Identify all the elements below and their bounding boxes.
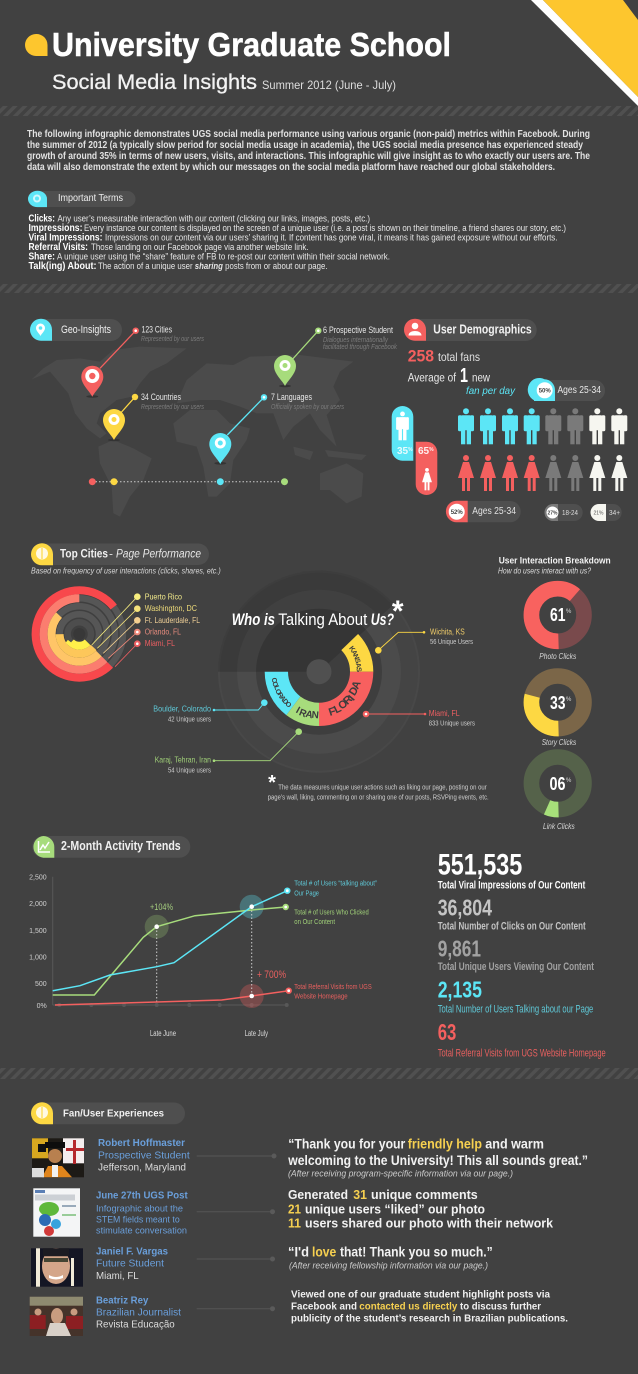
donut: photo clicks: Photo Clicks <box>539 652 576 661</box>
glossary of terms <box>28 214 566 272</box>
heading: who is talking about us: Who is <box>232 610 275 629</box>
stat: referral visits <box>438 1019 606 1060</box>
intro paragraph <box>27 129 590 173</box>
callout: Miami: Miami, FL <box>429 708 460 718</box>
post description: STEM fields meant to <box>96 1214 180 1225</box>
heading: experiences: Fan/User Experiences <box>63 1108 164 1120</box>
heading: top cities <box>31 543 209 565</box>
donut: story clicks: 33 <box>550 693 566 713</box>
donut chart: states <box>265 634 373 726</box>
donut: photo clicks: 61 <box>550 605 566 625</box>
subheading: top cities: Based on frequency of user interactions (clicks, shares, etc.) <box>31 565 221 575</box>
callout: Wichita: 56 Unique Users <box>430 639 473 646</box>
post results: 21 <box>288 1201 301 1216</box>
series labels: Website Homepage <box>294 992 348 1001</box>
donut: story clicks: Story Clicks <box>542 738 576 747</box>
subheading: interaction breakdown: How do users interact with us? <box>498 566 591 575</box>
name: Janiel F. Vargas <box>96 1245 168 1282</box>
map pin: countries: Represented by our users <box>141 404 204 411</box>
name: Robert Hoffmaster: Prospective Student <box>98 1149 190 1161</box>
name: Janiel F. Vargas: Janiel F. Vargas <box>96 1245 168 1257</box>
story: Beatriz Rey: to discuss further <box>460 1300 541 1312</box>
stat: clicks: 36,804 <box>438 895 492 921</box>
donut: story clicks: % <box>566 697 572 703</box>
photo: graduate with flag <box>32 1138 84 1177</box>
name: Robert Hoffmaster: Jefferson, Maryland <box>98 1162 186 1174</box>
x-axis labels: Late June <box>150 1029 176 1038</box>
heading: top cities: Page Performance <box>116 547 201 561</box>
panel: who is talking about us <box>153 571 489 801</box>
legend: 18-24 <box>544 504 583 521</box>
glossary of terms: Impressions on our content via our users’ sharing it. If content has gone viral, it means it has gained exposure without our efforts. <box>105 232 558 242</box>
growth labels <box>150 902 286 981</box>
donut: photo clicks <box>531 589 584 661</box>
panel: top cities <box>17 543 221 696</box>
post results: unique comments <box>371 1187 478 1202</box>
name: Robert Hoffmaster: Robert Hoffmaster <box>98 1137 185 1149</box>
testimonial: June 27th post <box>33 1187 554 1237</box>
name: Beatriz Rey <box>96 1294 181 1331</box>
map pin: cities: Represented by our users <box>141 336 204 343</box>
callout: Miami <box>363 708 475 727</box>
legend: women ages 25-34 <box>446 501 521 522</box>
map pin: languages <box>209 392 344 465</box>
story: Beatriz Rey: publicity of the student’s research in Brazilian publications. <box>291 1313 568 1325</box>
gender split: women: % <box>429 447 434 453</box>
highlight halos <box>145 895 264 1008</box>
intro paragraph: data will also demonstrate the extent by which our messages on the social media platform have reached our global stakeholders. <box>27 162 555 173</box>
quote: Robert Hoffmaster: (After receiving program-specific information via our page.) <box>288 1169 513 1179</box>
footnote <box>268 772 489 801</box>
fans per day: 1 <box>460 365 468 387</box>
panel: 2-month activity trends <box>29 836 377 1038</box>
chart axes: 2,000 <box>29 901 47 908</box>
legend: men ages 25-34 <box>528 378 605 401</box>
gender split: men <box>392 406 413 461</box>
panel: fan/user experiences <box>30 1102 588 1336</box>
quote: Janiel F. Vargas: that! Thank you so much.” <box>340 1244 493 1260</box>
donut: photo clicks: % <box>566 609 572 615</box>
stat: viral impressions: Total Viral Impressions of Our Content <box>438 879 586 891</box>
city legend: Ft. Lauderdale, FL <box>145 615 200 625</box>
donut: link clicks: 06 <box>550 774 566 794</box>
legend: men ages 25-34: 50% <box>539 388 551 394</box>
quote: Robert Hoffmaster: “Thank you for your <box>288 1135 406 1151</box>
series labels: on Our Content <box>294 917 336 926</box>
stat: clicks <box>438 895 586 932</box>
donut: story clicks <box>531 676 584 747</box>
map pin: countries: 34 Countries <box>141 392 181 402</box>
post description: Infographic about the <box>96 1204 183 1215</box>
map pin: prospective students <box>274 325 397 387</box>
story: Beatriz Rey <box>291 1288 568 1325</box>
heading: top cities: Top Cities <box>60 547 108 561</box>
testimonial: Robert Hoffmaster <box>32 1135 588 1179</box>
state labels: FLORIDA <box>327 679 364 719</box>
callout: Boulder: 42 Unique users <box>168 717 211 724</box>
stat: clicks: Total Number of Clicks on Our Content <box>438 920 586 932</box>
total fans: 258 <box>408 347 434 366</box>
quote: Janiel F. Vargas <box>288 1244 493 1270</box>
photo: group at table <box>30 1297 83 1336</box>
map pin: cities: 123 Cities <box>142 325 172 335</box>
date: Summer 2012 (June - July) <box>262 78 396 92</box>
panel: key totals <box>438 848 606 1060</box>
donut: link clicks: Link Clicks <box>543 822 575 831</box>
city legend: Washington, DC <box>145 603 197 613</box>
heading: geo-insights: Geo-Insights <box>61 324 111 336</box>
chart axes: 0% <box>37 1003 47 1010</box>
glossary of terms: Talk(ing) About: <box>28 261 96 272</box>
story: Beatriz Rey: Viewed one of our graduate student highlight posts via <box>291 1288 550 1300</box>
callout: Wichita <box>375 626 473 654</box>
growth labels: +104% <box>150 902 173 912</box>
quote: Janiel F. Vargas: “I'd <box>288 1244 309 1260</box>
series labels: Our Page <box>294 888 319 897</box>
name: Robert Hoffmaster <box>98 1137 190 1174</box>
heading: who is talking about us: Talking About <box>278 610 368 629</box>
heading: interaction breakdown: User Interaction Breakdown <box>499 555 611 565</box>
map pin: languages: Officially spoken by our users <box>271 404 344 411</box>
heading: who is talking about us: Us? <box>371 610 394 629</box>
legend: 34+ <box>590 504 622 521</box>
map pin: countries <box>103 392 204 441</box>
testimonial: Beatriz Rey <box>30 1288 568 1336</box>
gender split: women: 65 <box>418 446 429 457</box>
name: Beatriz Rey: Brazilian Journalist <box>96 1306 181 1318</box>
glossary of terms: A unique user using the “share” feature of FB to re-post our content within their social network. <box>57 252 390 262</box>
heading: user demographics: User Demographics <box>433 321 532 336</box>
glossary of terms: Those landing on our Facebook page via another website link. <box>91 242 308 252</box>
callout: Miami: 833 Unique users <box>429 720 475 727</box>
quote: Robert Hoffmaster: welcoming to the University! This all sounds great.” <box>287 1152 588 1168</box>
line: clicks <box>53 907 286 995</box>
logo icon <box>25 34 48 56</box>
donut: link clicks: % <box>566 778 572 784</box>
name: Beatriz Rey: Beatriz Rey <box>96 1294 148 1306</box>
pictogram row: men <box>458 408 627 444</box>
testimonial: Janiel F. Vargas <box>31 1244 493 1287</box>
footnote: page’s wall, liking, commenting on or sharing one of our posts, RSVPing events, etc. <box>268 794 489 801</box>
line: talking about <box>53 891 287 991</box>
series labels: Total Referral Visits from UGS <box>294 982 372 991</box>
fans per day: fan per day <box>466 385 516 397</box>
legend: women ages 25-34: 52% <box>451 510 463 516</box>
post description <box>96 1189 188 1236</box>
gender split: men: % <box>408 447 413 453</box>
heading: important terms: Important Terms <box>58 193 123 204</box>
state labels <box>270 645 364 721</box>
post description: June 27th UGS Post <box>96 1189 188 1201</box>
glossary of terms: Viral Impressions: <box>28 232 102 244</box>
series labels: Total # of Users Who Clicked <box>294 907 369 916</box>
stat: viral impressions <box>438 848 586 891</box>
total fans: total fans <box>438 350 480 364</box>
map pin: prospective students: Dialogues internationally <box>323 337 388 344</box>
glossary of terms: Clicks: <box>28 214 55 224</box>
state labels: COLORADO <box>270 677 293 710</box>
x-axis labels: Late July <box>245 1029 268 1038</box>
glossary of terms: Every instance our content is displayed on the screen of a unique user (i.e. a post is shown on their timeline, a friend shares our story, etc.) <box>84 223 566 233</box>
pictogram row: women <box>458 455 627 491</box>
quote: Robert Hoffmaster: and warm <box>485 1135 544 1151</box>
heading: geo-insights <box>30 319 122 341</box>
stat: unique users: 9,861 <box>438 936 481 962</box>
quote: Janiel F. Vargas: (After receiving fellowship information via our page.) <box>289 1260 488 1270</box>
line chart <box>29 874 377 1038</box>
map pin: prospective students: facilitated through Facebook <box>323 344 397 351</box>
glossary of terms: Referral Visits: <box>28 242 88 253</box>
legend: 34+: 34+ <box>609 510 620 517</box>
heading: user demographics <box>404 319 537 341</box>
callout: Karaj: 54 Unique users <box>168 768 211 775</box>
stat: talking about: 2,135 <box>438 976 482 1002</box>
corner ribbon <box>531 0 638 106</box>
gender split: women <box>416 442 437 495</box>
chart axes: 1,500 <box>29 928 47 935</box>
legend: 34+: 21% <box>593 510 604 516</box>
header <box>25 26 451 94</box>
post results: 11 <box>288 1216 301 1231</box>
x-axis labels <box>150 1029 268 1038</box>
timeline of dots <box>89 478 288 485</box>
series labels: Total # of Users “talking about” <box>294 879 377 888</box>
callout: Boulder <box>153 699 268 724</box>
post results: unique users “liked” our photo <box>305 1201 485 1216</box>
story: Beatriz Rey: contacted us directly <box>359 1300 457 1312</box>
chart axes: 2,500 <box>29 874 47 881</box>
connector lines <box>197 1154 276 1311</box>
name: Janiel F. Vargas: Future Student <box>96 1258 164 1270</box>
stat: viral impressions: 551,535 <box>438 848 522 881</box>
city legend: Miami, FL <box>145 638 175 648</box>
panel: geo-insights <box>30 319 397 517</box>
subtitle: Social Media Insights <box>52 71 257 94</box>
panel: user interaction breakdown <box>498 555 611 831</box>
post description: stimulate conversation <box>96 1225 187 1236</box>
glossary of terms: The action of a unique user sharing posts from or about our page. <box>98 261 328 271</box>
quote: Janiel F. Vargas: love <box>312 1244 336 1260</box>
radial background <box>218 571 420 773</box>
state labels: KANSAS <box>347 645 362 673</box>
heading: who is talking about us <box>232 595 404 629</box>
glossary of terms: Impressions: <box>28 223 82 234</box>
callout: Boulder: Boulder, Colorado <box>153 704 211 714</box>
heading: who is talking about us: * <box>392 595 404 628</box>
callout: Karaj <box>155 728 302 775</box>
heading: activity trends <box>32 836 190 858</box>
state labels: IRAN <box>294 705 319 721</box>
photo: post screenshot <box>33 1188 80 1237</box>
post results: 31 <box>353 1187 367 1202</box>
footnote: * <box>268 772 276 794</box>
legend: 18-24: 18-24 <box>562 510 578 517</box>
fans per day: new <box>472 373 491 385</box>
legend: 18-24: 27% <box>547 510 558 516</box>
post results: users shared our photo with their network <box>305 1216 554 1231</box>
fans per day <box>408 365 516 397</box>
city legend <box>92 591 200 667</box>
city legend: Orlando, FL <box>145 626 181 636</box>
fans per day: Average of <box>408 373 457 385</box>
legend: men ages 25-34: Ages 25-34 <box>558 385 601 396</box>
map pin: cities <box>81 325 204 398</box>
post results <box>288 1187 554 1231</box>
world map <box>32 347 367 517</box>
donut: link clicks <box>531 757 584 831</box>
map pin: languages: 7 Languages <box>271 392 312 402</box>
glossary of terms: Share: <box>28 252 55 263</box>
panel: user demographics <box>392 319 627 522</box>
stat: talking about <box>438 976 593 1016</box>
chart axes: 500 <box>35 981 47 988</box>
legend: women ages 25-34: Ages 25-34 <box>472 506 516 517</box>
heading: activity trends: 2-Month Activity Trends <box>61 839 181 853</box>
quote: Robert Hoffmaster <box>287 1135 588 1179</box>
story: Beatriz Rey: Facebook and <box>291 1300 357 1312</box>
city legend: Puerto Rico <box>145 591 182 601</box>
heading: top cities: - <box>109 547 113 561</box>
series labels <box>294 879 377 1001</box>
callout: Wichita: Wichita, KS <box>430 626 465 636</box>
name: Janiel F. Vargas: Miami, FL <box>96 1270 139 1282</box>
heading: important terms <box>28 191 136 207</box>
total fans <box>408 347 480 366</box>
post results: Generated <box>288 1187 348 1202</box>
gender split: men: 35 <box>397 446 408 457</box>
quote: Robert Hoffmaster: friendly help <box>408 1135 482 1151</box>
stat: unique users <box>438 936 594 973</box>
growth labels: + 700% <box>257 969 286 981</box>
chart axes: 1,000 <box>29 954 47 961</box>
callout: Karaj: Karaj, Tehran, Iran <box>155 755 211 765</box>
line: referral visits <box>55 991 289 1005</box>
map pin: prospective students: 6 Prospective Student <box>323 325 393 335</box>
name: Beatriz Rey: Revista Educação <box>96 1319 175 1331</box>
chart axes <box>29 874 289 1010</box>
heading: experiences <box>31 1102 185 1124</box>
photo: smiling student <box>31 1248 83 1287</box>
stat: referral visits: 63 <box>438 1019 456 1045</box>
title: University Graduate School <box>52 26 451 63</box>
glossary of terms: Any user’s measurable interaction with our content (clicking our links, images, posts, etc.) <box>58 214 370 224</box>
chart markers <box>154 888 292 998</box>
footnote: The data measures unique user actions such as liking our page, posting on our <box>278 784 487 791</box>
radial bar chart: top cities <box>17 572 141 696</box>
